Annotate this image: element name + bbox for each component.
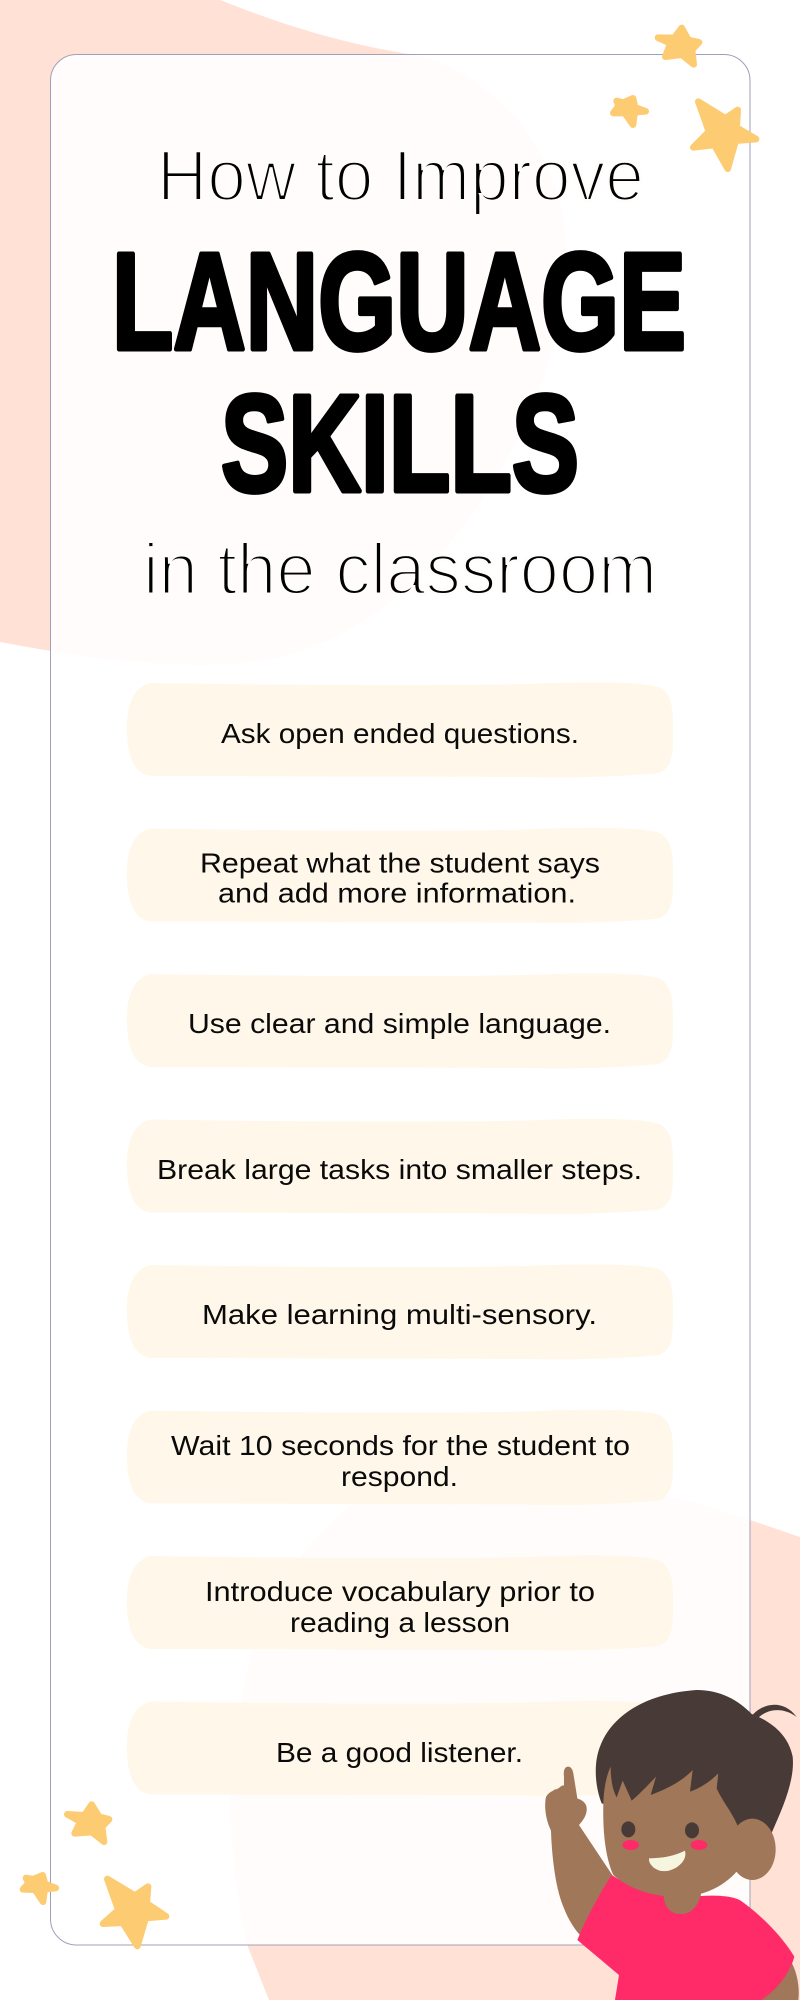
tip 8 — [127, 1701, 673, 1796]
tip 6: respond. — [341, 1461, 458, 1492]
tip 7: Introduce vocabulary prior to — [205, 1576, 595, 1607]
title line: How to Improve: How to Improve — [157, 136, 644, 216]
illustration: child pointing up — [545, 1690, 799, 2000]
tip 5 — [127, 1264, 673, 1359]
tip 2: and add more information. — [218, 878, 576, 908]
tip 3: Use clear and simple language. — [188, 1008, 611, 1039]
child face — [603, 1767, 745, 1897]
tip 6 — [127, 1410, 673, 1505]
child raised arm and hand — [545, 1767, 613, 1935]
title line: SKILLS: SKILLS — [221, 367, 579, 521]
background blob: top left peach — [0, 0, 566, 665]
title — [112, 136, 686, 610]
tip 7: reading a lesson — [290, 1607, 510, 1638]
child eyes — [621, 1821, 699, 1838]
child shirt — [577, 1875, 794, 2000]
icon: stars bottom left — [23, 1805, 166, 1946]
tip 4: Break large tasks into smaller steps. — [157, 1154, 642, 1185]
tip 5: Make learning multi-sensory. — [202, 1299, 597, 1330]
tip 1: Ask open ended questions. — [221, 718, 579, 749]
icon: stars top right — [613, 28, 756, 169]
child far arm — [760, 1960, 799, 2000]
tip 7 — [127, 1555, 673, 1650]
child smile — [649, 1851, 685, 1871]
background blob: bottom right peach — [230, 1486, 800, 2000]
tip 2: Repeat what the student says — [200, 848, 600, 878]
child hair wisp — [752, 1705, 797, 1719]
child ear — [729, 1819, 776, 1880]
tip 2 — [127, 828, 673, 923]
tip 1 — [127, 682, 673, 777]
child neck — [663, 1888, 702, 1914]
tip 4 — [127, 1119, 673, 1214]
title line: in the classroom: in the classroom — [143, 530, 657, 610]
child cheeks — [622, 1840, 707, 1850]
tip 3 — [127, 973, 673, 1068]
tip 6: Wait 10 seconds for the student to — [171, 1430, 630, 1461]
tip 8: Be a good listener. — [276, 1737, 523, 1768]
child hair back — [596, 1690, 793, 1840]
